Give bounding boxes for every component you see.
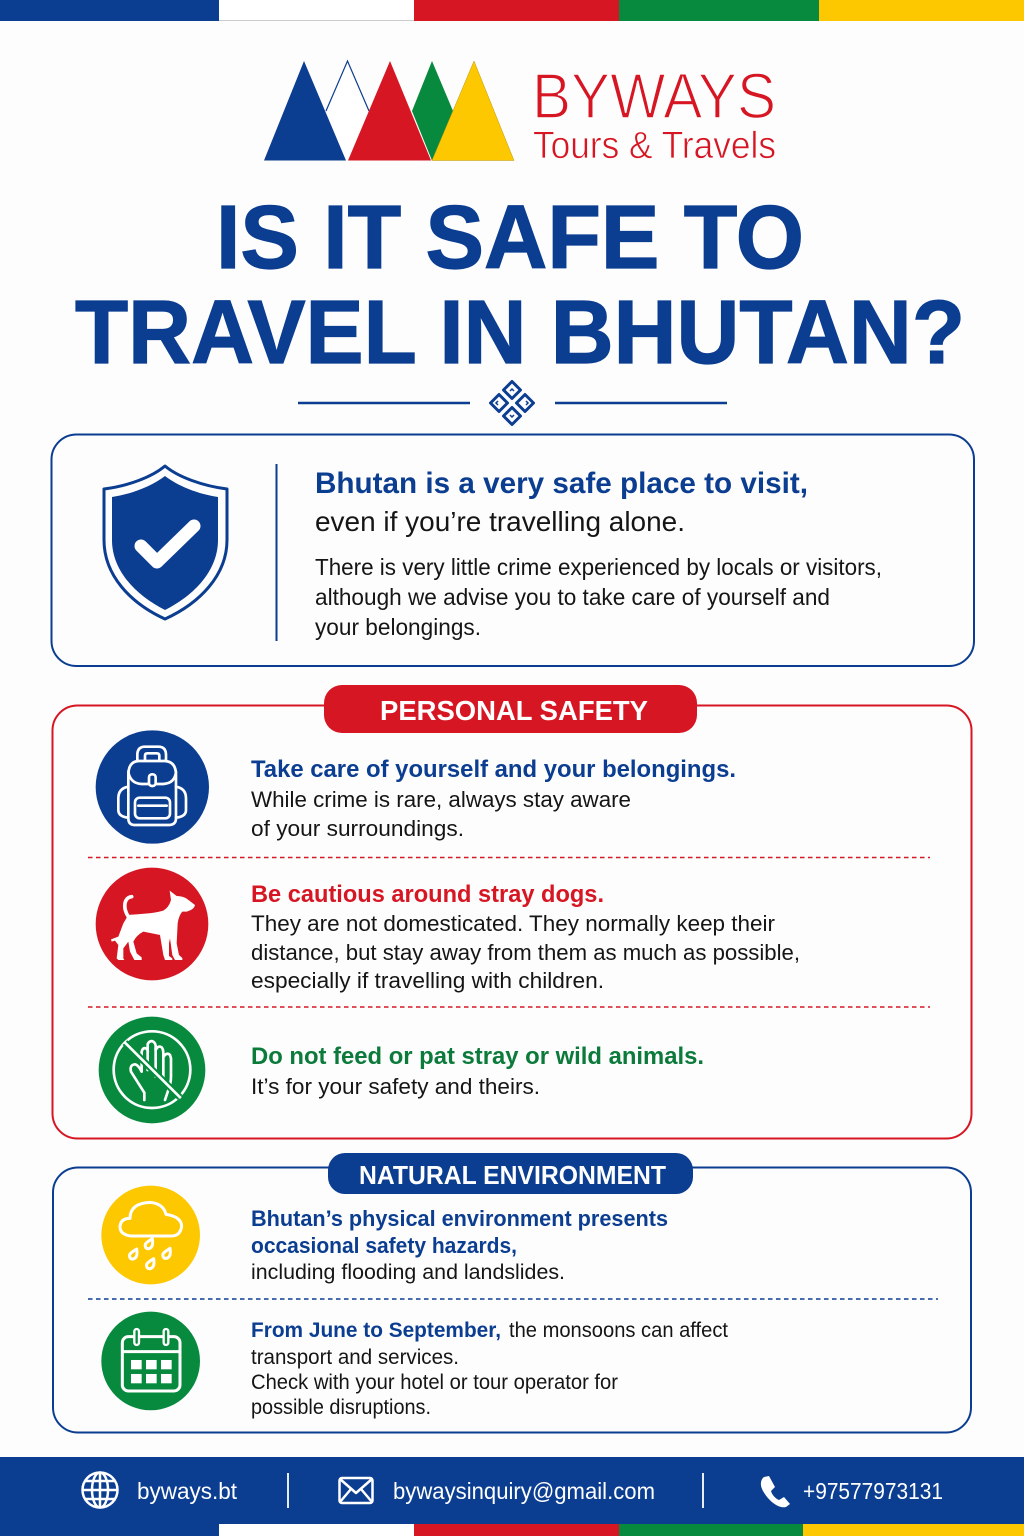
logo tagline: Tours & Travels xyxy=(533,125,776,167)
item: stray dogs: distance, but stay away from them as much as possible, xyxy=(251,940,800,965)
item: monsoons xyxy=(251,1318,728,1419)
item: belongings: While crime is rare, always stay aware xyxy=(251,787,631,812)
icon: shield with check xyxy=(104,466,227,619)
item: monsoons: transport and services. xyxy=(251,1346,459,1369)
item: monsoons: Check with your hotel or tour operator for xyxy=(251,1371,618,1394)
item: stray dogs: They are not domesticated. They normally keep their xyxy=(251,911,775,936)
icon: no touching hand xyxy=(99,1017,205,1123)
item: belongings: Take care of yourself and your belongings. xyxy=(251,756,736,783)
intro heading: Bhutan is a very safe place to visit, xyxy=(315,467,808,500)
icon: envelope xyxy=(340,1478,372,1503)
icon: phone xyxy=(761,1476,790,1507)
icon: backpack xyxy=(96,730,209,844)
intro body text xyxy=(315,554,882,640)
title: TRAVEL IN BHUTAN? xyxy=(75,283,965,383)
natural environment heading xyxy=(328,1153,693,1194)
intro body text: There is very little crime experienced by locals or visitors, xyxy=(315,554,882,580)
item: belongings: of your surroundings. xyxy=(251,816,464,841)
item: monsoons: From June to September, xyxy=(251,1318,501,1342)
intro body text: although we advise you to take care of yourself and xyxy=(315,584,830,610)
footer xyxy=(0,1457,1024,1536)
item: do not feed: It’s for your safety and theirs. xyxy=(251,1074,540,1099)
icon: dog xyxy=(96,868,208,980)
title xyxy=(75,188,965,383)
icon: rain cloud xyxy=(101,1186,200,1284)
top colour strip xyxy=(0,0,1024,21)
icon: calendar xyxy=(101,1312,200,1410)
panel: natural environment xyxy=(53,1153,971,1432)
item: stray dogs: especially if travelling with children. xyxy=(251,968,604,993)
email: bywaysinquiry@gmail.com xyxy=(393,1478,655,1504)
item: monsoons: the monsoons can affect xyxy=(509,1319,728,1342)
item: do not feed: Do not feed or pat stray or wild animals. xyxy=(251,1043,704,1070)
natural environment heading: NATURAL ENVIRONMENT xyxy=(359,1160,666,1190)
item: hazards xyxy=(251,1206,668,1284)
personal safety heading xyxy=(324,685,697,733)
item: do not feed xyxy=(251,1043,704,1099)
item: stray dogs xyxy=(251,881,800,993)
item: hazards: occasional safety hazards, xyxy=(251,1233,517,1258)
item: hazards: including flooding and landslides. xyxy=(251,1261,565,1284)
item: stray dogs: Be cautious around stray dogs. xyxy=(251,881,604,908)
intro subheading: even if you’re travelling alone. xyxy=(315,506,685,537)
item: monsoons: possible disruptions. xyxy=(251,1396,431,1419)
item: belongings xyxy=(251,756,736,841)
panel: personal safety xyxy=(52,685,972,1138)
icon: globe xyxy=(82,1472,118,1508)
personal safety heading: PERSONAL SAFETY xyxy=(380,695,648,726)
phone number: +97577973131 xyxy=(803,1478,943,1504)
bottom colour strip xyxy=(219,1524,1024,1536)
ornament divider xyxy=(298,382,727,424)
panel: safe place intro xyxy=(52,434,974,666)
logo mountains xyxy=(264,61,514,160)
title: IS IT SAFE TO xyxy=(216,188,804,288)
item: hazards: Bhutan’s physical environment presents xyxy=(251,1206,668,1231)
intro body text: your belongings. xyxy=(315,614,481,640)
website: byways.bt xyxy=(137,1478,238,1504)
logo wordmark: BYWAYS xyxy=(532,60,776,132)
logo xyxy=(264,60,776,167)
